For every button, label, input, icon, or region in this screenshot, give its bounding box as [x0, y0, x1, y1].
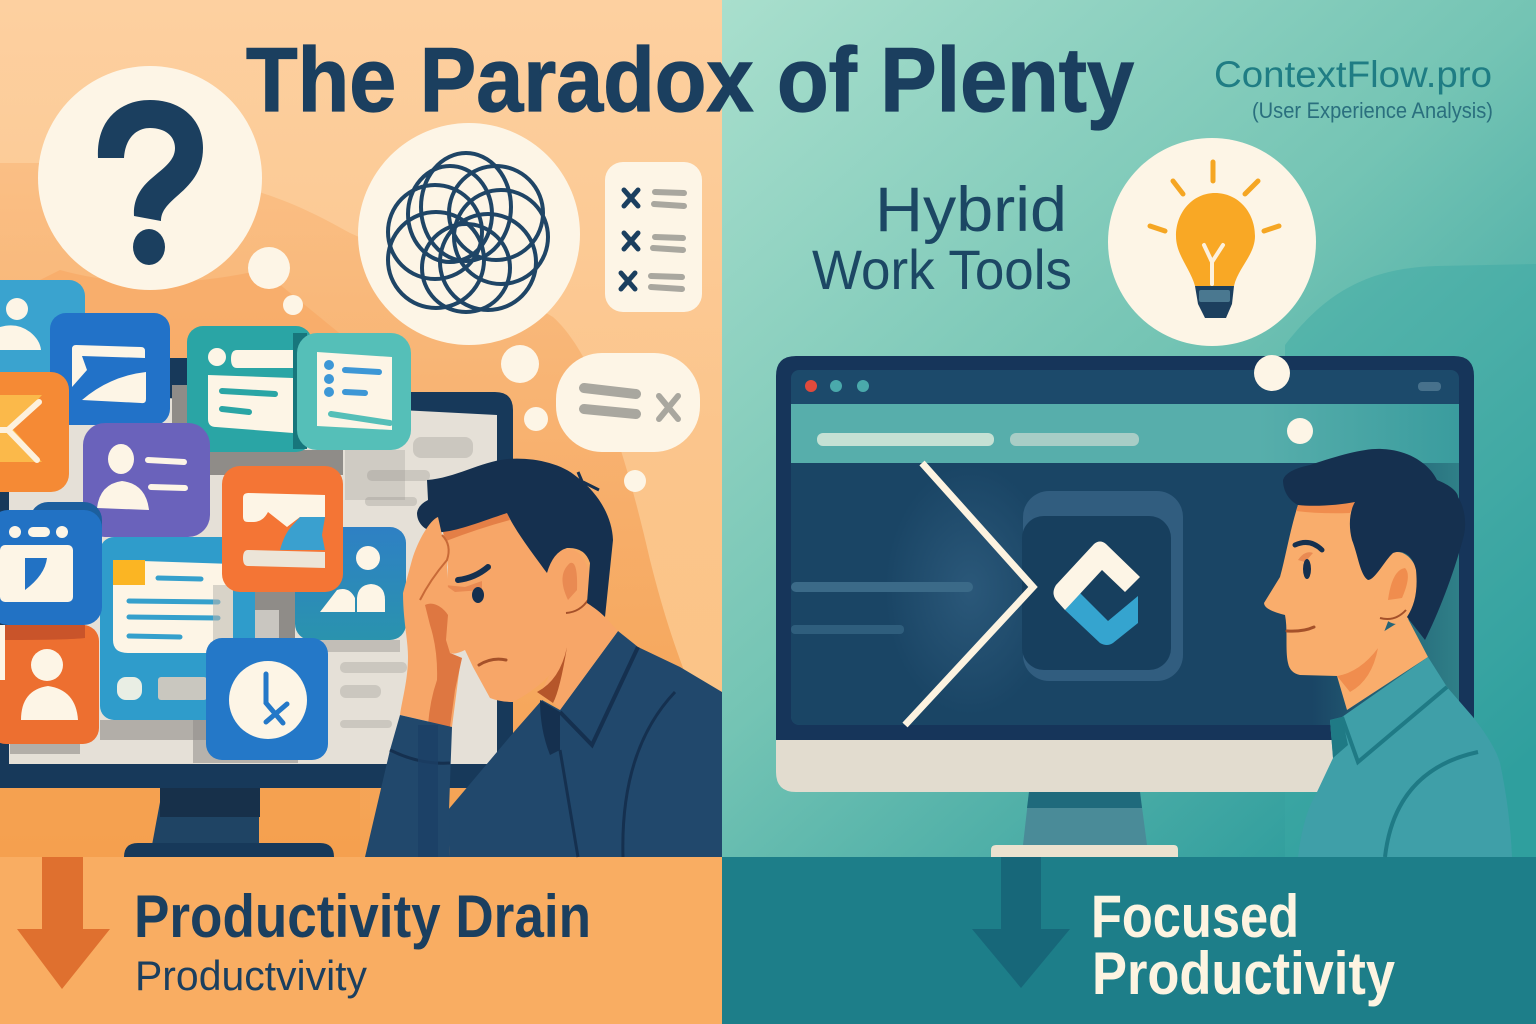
thought bubbles right: [1254, 355, 1313, 444]
hair: [417, 459, 613, 617]
window dots: [805, 380, 817, 392]
panel: bottom band right: [722, 857, 1536, 1024]
neck: [1337, 617, 1428, 710]
toolbar pills: [817, 433, 994, 446]
icon: speech bubble with cross: [556, 353, 700, 452]
app icon: teal card: [187, 326, 312, 452]
app icon: purple contact: [83, 423, 210, 537]
thought bubbles left: [248, 247, 646, 492]
app icon: light teal list: [297, 333, 411, 450]
panel: right background: [722, 0, 1536, 857]
app icon: blue image card: [50, 313, 170, 425]
label: productivity drain: Productvivity: [135, 952, 367, 999]
app icon: light blue person: [0, 280, 85, 375]
logo tile: [1023, 491, 1183, 681]
arrow: right down: [972, 857, 1070, 988]
left monitor: [0, 358, 513, 857]
shirt: [448, 631, 722, 857]
panel: bottom band left: [0, 857, 722, 1024]
ear: [546, 549, 590, 615]
brand name: ContextFlow.pro: [1214, 54, 1492, 95]
heading: hybrid work tools: Hybrid: [875, 175, 1067, 245]
face: [1264, 502, 1400, 676]
label: productivity drain: [134, 883, 591, 999]
mouth: [1287, 627, 1314, 631]
app icon: blue people: [295, 527, 406, 640]
icon: tangled rings bubble: [358, 123, 580, 345]
app icon: orange envelope: [0, 372, 69, 492]
label: focused productivity: Focused: [1091, 883, 1299, 950]
app icon: orange picture: [222, 466, 343, 592]
brand subtitle: (User Experience Analysis): [1252, 98, 1493, 123]
collar: [540, 700, 560, 755]
heading: hybrid work tools: Work Tools: [812, 238, 1072, 301]
label: focused productivity: [1091, 883, 1396, 1007]
title: The Paradox of Plenty: [246, 30, 1134, 131]
hair: [1283, 449, 1465, 640]
sleeve: [365, 715, 452, 857]
chin: [776, 738, 1350, 792]
app icon: orange person: [0, 625, 99, 744]
neck: [542, 600, 618, 710]
stressed man: [365, 459, 722, 857]
ear: [1374, 552, 1420, 624]
icon: light bulb: [1108, 138, 1316, 346]
icon shadows: [10, 385, 405, 763]
face: [443, 513, 590, 702]
logo mark: [1065, 593, 1138, 645]
panel: left background: [0, 0, 722, 857]
heading: hybrid work tools: [812, 175, 1072, 301]
eye and brow: [458, 567, 488, 580]
app icon: blue browser: [0, 502, 102, 625]
shirt: [1298, 657, 1512, 857]
mouth: [479, 659, 506, 665]
app icon: sky blue document: [100, 537, 255, 720]
faded lines: [791, 582, 973, 592]
hand: [400, 517, 462, 727]
screen text lines: [340, 437, 473, 728]
eye and brow: [1295, 542, 1322, 550]
screen: [791, 370, 1459, 725]
arrow: left down: [17, 857, 110, 989]
frame: [776, 356, 1474, 740]
label: focused productivity: Productivity: [1092, 940, 1396, 1007]
right monitor: [776, 356, 1474, 857]
label: productivity drain: Productivity Drain: [134, 883, 591, 950]
icon: question mark bubble: [38, 66, 262, 290]
stand: [1023, 792, 1147, 845]
app icon: blue clock: [206, 638, 328, 760]
icon: checklist card: [605, 162, 702, 312]
calm man: [1264, 449, 1512, 857]
chevron: [905, 463, 1033, 725]
